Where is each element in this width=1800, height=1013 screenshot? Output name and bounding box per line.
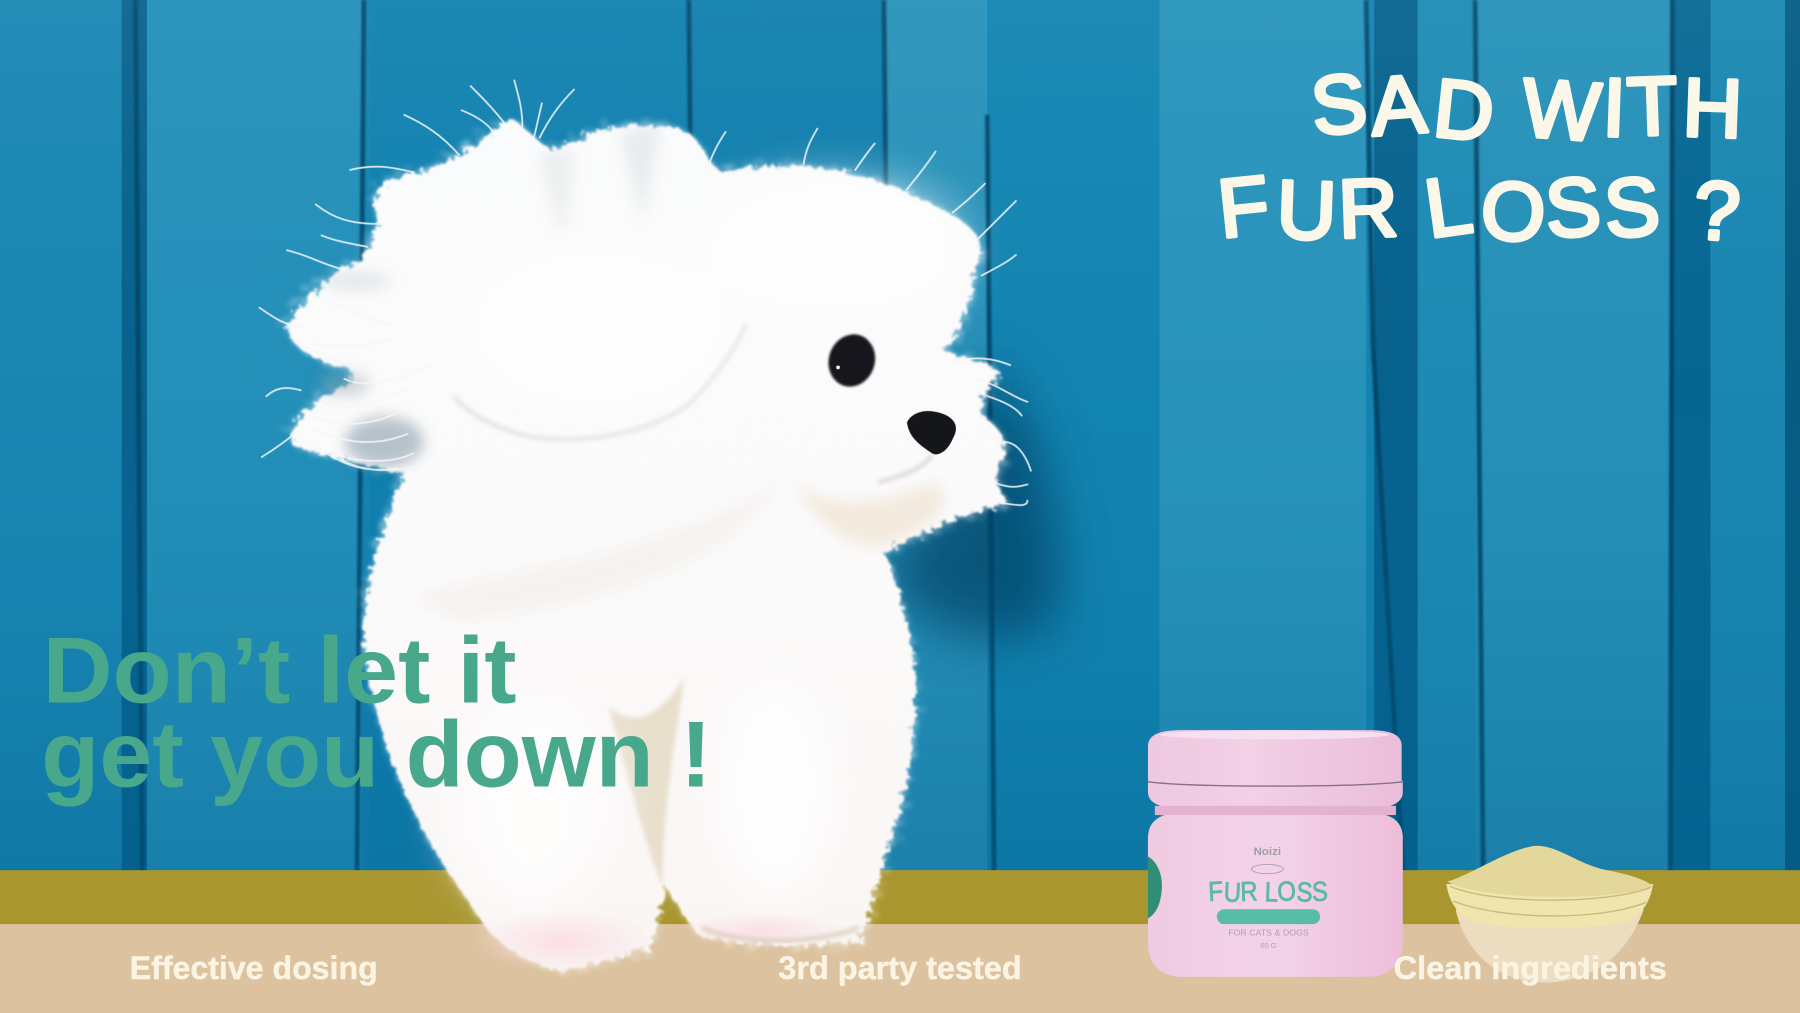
table front band (0, 924, 1800, 1013)
right paw toes (703, 928, 859, 941)
eye (822, 328, 882, 393)
dog (259, 80, 1031, 973)
benefit: effective dosing: Effective dosing (130, 950, 378, 986)
benefit: third party tested: 3rd party tested (778, 950, 1022, 986)
line one: SAD WITH (1307, 55, 1744, 160)
dog shadow on curtain (884, 356, 1058, 639)
nose (907, 411, 956, 454)
teal label pill (1217, 909, 1320, 924)
mane gaps (319, 126, 660, 467)
small pill (1251, 864, 1283, 874)
headline: sad with fur loss (1214, 55, 1744, 260)
brand name: Noizi (1254, 846, 1281, 858)
lid highlight (1159, 730, 1389, 739)
chest shading (413, 482, 781, 620)
slogan line two: get you down ! (41, 701, 712, 806)
mouth fur (878, 455, 932, 482)
green sticker (1148, 856, 1162, 918)
jar body (1148, 813, 1403, 977)
product jar (1148, 730, 1403, 977)
benefit: clean ingredients: Clean ingredients (1394, 950, 1667, 986)
benefits row (130, 950, 1667, 986)
ear outline (453, 324, 746, 439)
left leg highlight (453, 695, 614, 913)
jar lid (1148, 730, 1402, 785)
jar neck (1155, 806, 1396, 815)
powder mound (1448, 846, 1653, 897)
dog body silhouette (287, 117, 1010, 971)
powder bowl (1446, 846, 1653, 983)
pet text: FOR CATS & DOGS (1228, 928, 1309, 938)
fur halo (287, 117, 1010, 971)
slogan line one: Don’t let it (42, 618, 517, 723)
right paw tint (683, 913, 844, 947)
product name: FUR LOSS (1207, 875, 1328, 908)
table top (0, 870, 1800, 925)
right leg highlight (717, 683, 832, 901)
bowl rim (1450, 886, 1651, 916)
bowl upper (1446, 884, 1653, 928)
jar lid ring (1148, 781, 1403, 808)
weight text: 60 G (1260, 941, 1277, 950)
left paw tint (473, 909, 652, 973)
flyaway hair strands (259, 80, 1031, 505)
slogan (41, 618, 712, 806)
bowl lower (1456, 909, 1644, 983)
neck shading (792, 482, 944, 546)
gap between legs (608, 677, 684, 886)
head highlight (706, 184, 959, 310)
line two: FUR LOSS ? (1214, 157, 1743, 260)
ear highlight (465, 247, 729, 408)
lid seam (1148, 782, 1403, 786)
